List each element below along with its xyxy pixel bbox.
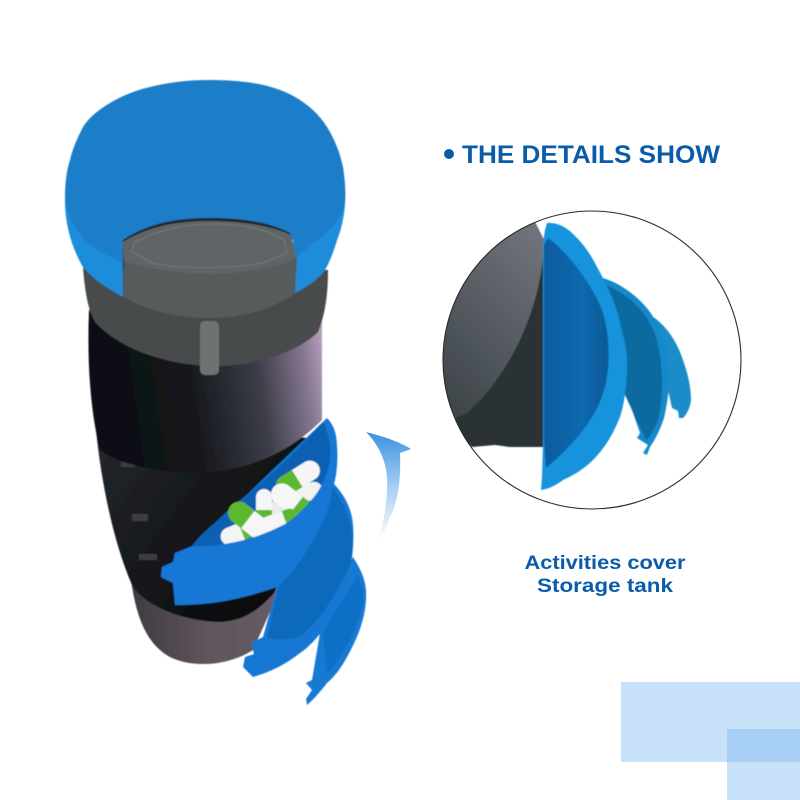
caption bbox=[524, 553, 686, 597]
heading bullet bbox=[444, 149, 454, 159]
circle outline bbox=[443, 211, 741, 509]
bottle with lid and trays bbox=[65, 80, 366, 705]
decorative corner squares bbox=[621, 682, 800, 800]
button window outline bbox=[132, 224, 287, 268]
slot marks bbox=[121, 462, 157, 560]
collar bbox=[83, 268, 328, 366]
bottle silver base bbox=[131, 580, 282, 664]
tray 3 inner bbox=[323, 575, 363, 673]
circle background bbox=[443, 211, 741, 509]
tray 1 inner bowl bbox=[192, 422, 330, 546]
heading bbox=[444, 141, 720, 169]
loop tab bbox=[200, 321, 219, 375]
main tray inner bbox=[544, 238, 609, 468]
bottle lower dark section bbox=[96, 430, 335, 622]
button recess shadow bbox=[123, 218, 297, 270]
caption line one: Activities cover bbox=[524, 553, 686, 574]
tray 2 bbox=[243, 483, 353, 677]
light bottle highlight bbox=[440, 215, 544, 425]
heading text: THE DETAILS SHOW bbox=[462, 141, 720, 169]
gray button top bbox=[123, 221, 297, 274]
pill bbox=[224, 497, 278, 547]
tray 1 bbox=[161, 418, 337, 605]
caption line two: Storage tank bbox=[537, 576, 674, 597]
tray 1 front lip bbox=[161, 447, 337, 605]
dark bottle section bbox=[455, 223, 544, 448]
gray button front bbox=[124, 258, 297, 318]
rotation arrow bbox=[366, 432, 411, 541]
second tray inner bbox=[606, 285, 662, 440]
bottle upper body bbox=[88, 310, 322, 472]
pill bbox=[267, 479, 319, 527]
tray 3 bbox=[306, 557, 366, 705]
third tray bbox=[650, 315, 691, 418]
pill bbox=[256, 489, 272, 527]
lid lighter rim bbox=[65, 200, 345, 297]
pill bbox=[272, 457, 324, 499]
pill bbox=[291, 480, 325, 504]
pills bbox=[218, 457, 325, 548]
pill bbox=[257, 506, 301, 536]
second tray bbox=[603, 278, 669, 455]
tray 2 inner bbox=[267, 487, 352, 639]
detail circle bbox=[440, 211, 741, 509]
pill bbox=[266, 490, 292, 524]
main tray bbox=[541, 223, 627, 490]
pill bbox=[218, 516, 262, 548]
pill stub bbox=[236, 541, 247, 545]
lid bbox=[65, 80, 345, 297]
detail contents bbox=[440, 215, 691, 490]
